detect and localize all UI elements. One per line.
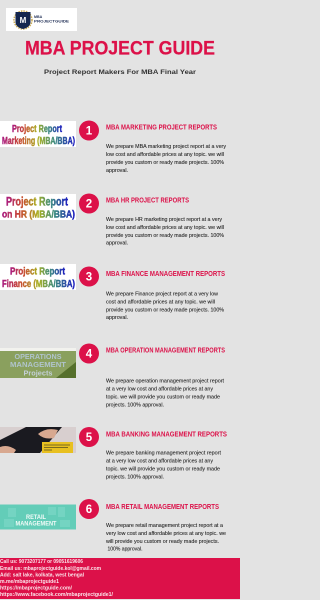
image: banking cards [0,427,76,453]
footer contact panel: Add: salt lake, kolkata, west bengal [0,572,84,578]
body text 1 [106,144,226,174]
number badge 5 [79,427,99,447]
number badge 4: 4 [86,349,93,361]
body text 6: very low cost and affordable prices at any topic. we [106,531,226,537]
heading 3: MBA FINANCE MANAGEMENT REPORTS [106,271,225,278]
image: retail management: MANAGEMENT [16,520,57,528]
logo: M [20,16,27,25]
image: operations management: Projects [24,368,52,378]
body text 1: We prepare MBA marketing project report at a very [106,144,226,150]
image: project report finance [0,264,76,290]
subtitle: Project Report Makers For MBA Final Year [44,69,196,76]
number badge 3: 3 [86,272,92,284]
section 1: marketing [0,120,226,174]
body text 5: topic. we will provide you custom or ready made [106,467,220,473]
section 6: retail [0,499,226,552]
logo: PROJECTGUIDE [34,20,70,24]
body text 1: provide you custom or ready made projects. 100% [106,160,224,166]
body text 6: We prepare retail management project report at a [106,523,223,529]
number badge 1 [79,120,99,140]
number badge 2: 2 [86,199,92,211]
image: project report HR [0,194,76,220]
image: project report marketing: Marketing (MBA/BBA) [2,135,75,147]
body text 1: low cost and affordable prices at any topic. we will [106,152,224,158]
footer contact panel: https://mbaprojectguide.com/ [0,586,72,592]
body text 3: cost and affordable prices at any topic. we will [106,300,215,306]
body text 2: provide you custom or ready made projects. 100% [106,233,224,239]
footer contact panel [0,558,240,599]
body text 4: We prepare operation management project report [106,379,225,385]
image: operations management [0,348,76,378]
body text 4: at a very low cost and affordable prices at any [106,387,213,393]
footer contact panel: Email us: mbaprojectguide.kol@gmail.com [0,566,101,572]
section 4: operations [0,344,225,409]
section 2: HR [0,194,224,246]
body text 6: will provide you custom or ready made projects. [106,539,219,545]
heading 6: MBA RETAIL MANAGEMENT REPORTS [106,504,219,511]
image: project report marketing: Project Report [12,123,62,135]
body text 2: approval. [106,240,128,246]
image: project report finance: Finance (MBA/BBA) [2,278,75,290]
logo [6,8,77,31]
body text 1: approval. [106,168,128,174]
image: project report HR: Project Report [6,196,68,208]
image: project report HR: on HR (MBA/BBA) [2,208,75,220]
body text 4: projects. 100% approval. [106,403,164,409]
section 5: banking [0,427,227,481]
body text 3: approval. [106,315,128,321]
body text 6 [106,523,226,552]
image: project report marketing [0,121,76,147]
number badge 3 [79,266,99,286]
body text 2 [106,217,224,246]
body text 2: We prepare HR marketing project report at a very [106,217,222,223]
heading 2: MBA HR PROJECT REPORTS [106,198,189,205]
body text 3: We prepare Finance project report at a very low [106,292,218,298]
footer contact panel: https://www.facebook.com/mbaprojectguide1/ [0,592,113,598]
number badge 6: 6 [86,504,92,516]
body text 5 [106,451,222,481]
body text 2: low cost and affordable prices at any topic. we will [106,225,224,231]
body text 4 [106,379,225,409]
image: retail management [0,504,76,530]
number badge 5: 5 [86,432,93,444]
body text 6: 100% approval. [108,546,142,552]
section 3: finance [0,264,225,321]
footer contact panel: Call us: 9073207177 or 09051619606 [0,559,83,565]
number badge 2 [79,194,99,214]
body text 5: projects. 100% approval. [106,475,164,481]
logo: MBA [34,15,43,19]
image: retail management: RETAIL [26,514,46,521]
image: operations management: OPERATIONS [14,352,62,361]
heading 1: MBA MARKETING PROJECT REPORTS [106,125,217,132]
image: project report finance: Project Report [10,266,65,278]
body text 4: topic. we will provide you custom or ready made [106,395,220,401]
number badge 4 [79,344,99,364]
title: MBA PROJECT GUIDE [25,39,215,60]
body text 3: provide you custom or ready made projects. 100% [106,308,224,314]
footer contact panel: m.me/mbaprojectguide1 [0,579,59,585]
image: operations management: MANAGEMENT [10,360,67,369]
body text 3 [106,292,224,321]
number badge 1: 1 [86,126,93,138]
body text 5: We prepare banking management project report [106,451,222,457]
number badge 6 [79,499,99,519]
body text 5: at a very low cost and affordable prices at any [106,459,213,465]
